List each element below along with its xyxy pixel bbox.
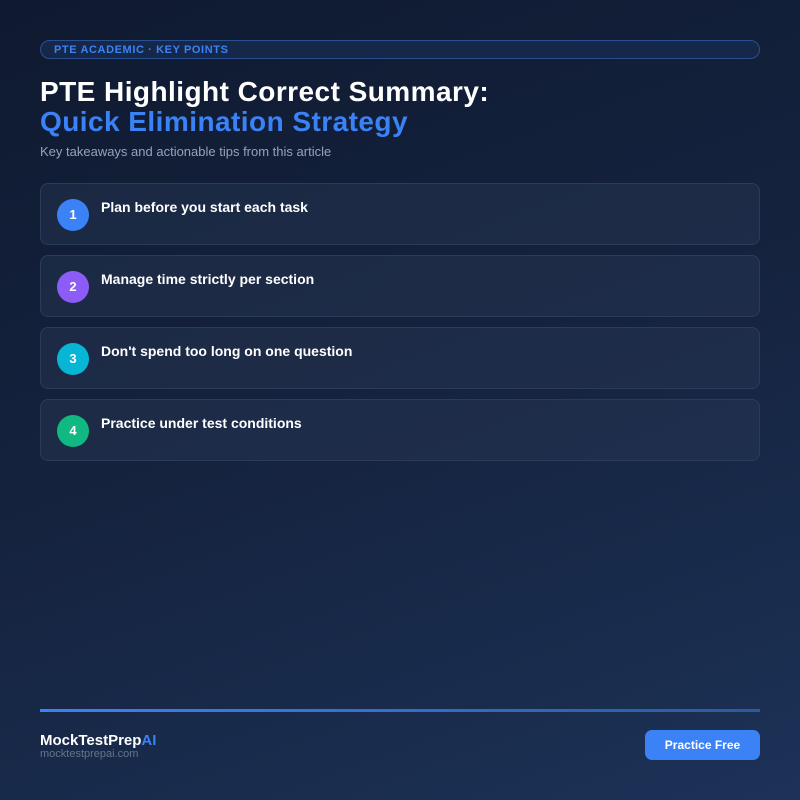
subtitle: Key takeaways and actionable tips from this article bbox=[40, 144, 331, 159]
card 1 bbox=[40, 183, 760, 245]
card 1: Plan before you start each task bbox=[101, 199, 308, 215]
card 2: 2 bbox=[69, 279, 77, 294]
brand url: mocktestprepai.com bbox=[40, 748, 138, 760]
title accent: Quick Elimination Strategy bbox=[40, 106, 408, 137]
cta button bbox=[645, 730, 760, 760]
card 2 bbox=[40, 255, 760, 317]
tag pill bbox=[40, 40, 760, 59]
card 3: 3 bbox=[69, 351, 77, 366]
card 2: Manage time strictly per section bbox=[101, 271, 314, 287]
brand logo: MockTestPrepAI bbox=[40, 732, 156, 749]
card 4 bbox=[40, 399, 760, 461]
card 3: Don't spend too long on one question bbox=[101, 343, 352, 359]
card 1: 1 bbox=[69, 207, 77, 222]
card 3 bbox=[40, 327, 760, 389]
card 4: 4 bbox=[69, 423, 77, 438]
cta button: Practice Free bbox=[665, 738, 740, 752]
title: PTE Highlight Correct Summary: bbox=[40, 76, 489, 107]
card 4: Practice under test conditions bbox=[101, 415, 302, 431]
tag pill: PTE ACADEMIC · KEY POINTS bbox=[54, 44, 229, 56]
